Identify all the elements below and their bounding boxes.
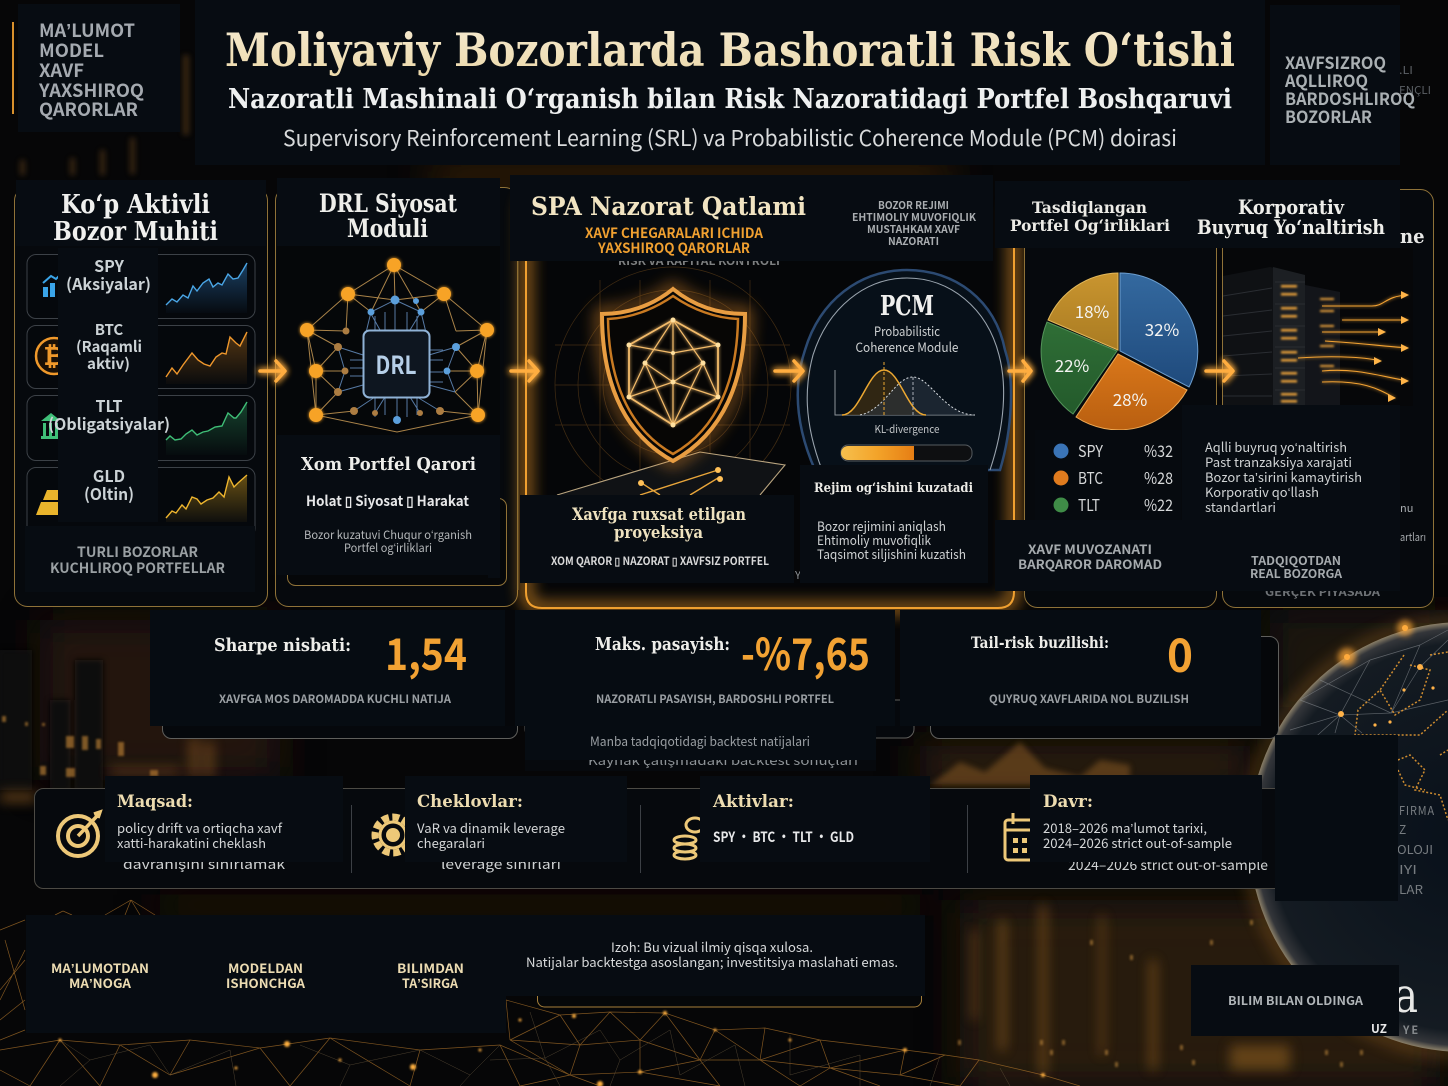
chart: PCM dome with KL divergence: KL-divergence [874,421,940,437]
metric: tail-risk violations: Tail-risk buzilishi: [971,633,1109,652]
asset labels: SPY [94,253,125,277]
metric: tail-risk violations: 0 [1167,620,1193,686]
footer: three pillars: TA’SIRGA [402,973,459,992]
asset labels [48,248,170,522]
card: period: 2018–2026 ma’lumot tarixi, [1043,818,1207,837]
metric: Sharpe ratio: 1,54 [385,619,467,683]
heading: Portfel Og‘irliklari [1010,216,1171,235]
card: risk-permitted projection: XOM QAROR ▯ NAZORAT ▯ XAVFSIZ PORTFEL [551,553,769,569]
callout: top-left keywords: MODEL [39,37,104,63]
legend: %28 [1144,465,1173,489]
asset row: TLT [27,396,255,460]
background: illuminated globe: OLOJI [1397,841,1433,858]
panel: institutional order routing: GERÇEK PİYASADA [1265,584,1381,600]
metric: maximum drawdown: NAZORATLI PASAYISH, BARDOSHLI PORTFEL [596,691,834,707]
asset labels: (Aksiyalar) [66,271,151,295]
footer: brand slogan: UZ [1371,1020,1387,1037]
metric: tail-risk violations [900,610,1278,738]
panel: institutional order routing: nu [1400,500,1413,516]
chart: PCM dome with KL divergence [798,270,1011,470]
caption: XAVF MUVOZANATI [1028,539,1152,558]
metric: tail-risk violations: QUYRUQ XAVFLARIDA NOL BUZILISH [989,691,1189,707]
card: risk-permitted projection [520,495,794,583]
heading: Ko‘p Aktivli [61,190,210,220]
peek text below heading [618,253,801,583]
caption [25,526,255,592]
header peek text at right: .LI [1399,62,1413,78]
card: regime drift monitoring: Bozor rejimini aniqlash [817,516,946,535]
scope line: Supervisory Reinforcement Learning (SRL) va Probabilistic Coherence Module (PCM) doirasi [283,121,1177,153]
card: objective: xatti-harakatini cheklash [117,833,266,852]
metric: Sharpe ratio [150,610,519,738]
callout: top-right keywords: XAVFSIZROQ [1285,49,1386,74]
header peek text at right: ENÇLI [1399,82,1431,98]
asset labels: TLT [95,393,123,417]
card: risk-permitted projection: proyeksiya [614,523,703,543]
title: Moliyaviy Bozorlarda Bashoratli Risk O‘tishi [225,23,1235,77]
heading [1190,180,1400,248]
metric: maximum drawdown: Kaynak çalışmadaki backtest sonuçları [588,750,858,769]
legend: TLT [1078,492,1100,516]
text block: routing benefits: TADQIQOTDAN [1251,552,1341,569]
callout: top-left keywords: QARORLAR [39,96,138,122]
panel: header title block [195,0,1265,165]
pie chart: portfolio weights: 28% [1113,386,1147,411]
card: assets: Aktivlar: [712,792,794,812]
heading: SPA Nazorat Qatlami [531,192,806,221]
icon: coin stacks [674,818,704,859]
panel: institutional order routing: artları [1400,529,1426,545]
heading: Moduli [347,214,428,243]
heading: NAZORATI [888,234,939,249]
footer: brand slogan: YE [1402,1022,1420,1038]
callout: top-left keywords: MA’LUMOT [39,17,135,43]
caption: TURLI BOZORLAR [77,542,198,562]
card: period: Davr: [1043,792,1093,812]
metric: maximum drawdown: -%7,65 [741,619,870,683]
metric: Sharpe ratio: Sharpe nisbati: [214,635,351,656]
asset labels: aktiv) [87,353,130,374]
peek text below cards: davranışını sınırlamak [123,854,285,874]
callout: top-left keywords: XAVF [39,57,84,83]
heading [995,181,1191,248]
card: constraints: VaR va dinamik leverage [417,818,565,837]
text block: routing benefits: Korporativ qo‘llash [1205,482,1319,501]
pie chart: portfolio weights: 18% [1075,298,1109,323]
card: period: 2024–2026 strict out-of-sample [1043,833,1232,852]
footer: disclaimer note: Izoh: Bu vizual ilmiy qisqa xulosa. [611,937,813,956]
footer: disclaimer note [505,915,925,1007]
callout: top-left keywords [12,4,180,132]
icon: gear [375,817,411,853]
card: regime drift monitoring [800,465,988,583]
asset labels: GLD [93,463,125,487]
icon: server racks with routed orders [1223,248,1413,406]
icon: target [58,812,100,856]
caption: KUCHLIROQ PORTFELLAR [50,558,225,578]
icon: calendar [1005,813,1035,860]
subtitle: Nazoratli Mashinali O‘rganish bilan Risk Nazoratidagi Portfel Boshqaruvi [228,84,1232,115]
text block: routing benefits: Bozor ta’sirini kamaytirish [1205,467,1362,486]
asset row: BTC: ₿ [43,336,65,373]
legend [1035,430,1181,520]
background: illuminated globe: LAR [1399,881,1423,898]
card: constraints [405,776,627,862]
text block: routing benefits: Past tranzaksiya xarajati [1205,452,1352,471]
background: illuminated globe [1248,620,1448,1053]
card: constraints: Cheklovlar: [417,792,523,812]
callout: top-right keywords [1270,5,1415,165]
legend: %32 [1144,438,1173,462]
footer: three pillars [26,915,506,1033]
panel: multi-asset market environment [14,180,268,606]
panel: validated portfolio weights [995,181,1216,608]
asset row: SPY [27,254,255,318]
heading [277,178,500,246]
heading: Buyruq Yo‘naltirish [1197,215,1385,239]
legend: %22 [1144,492,1173,516]
panel: SPA control layer [510,175,1014,608]
callout: top-right keywords: AQLLIROQ [1284,67,1368,92]
peek text below cards: leverage sınırları [441,854,561,874]
heading: Korporativ [1238,195,1345,219]
icon: DRL neural network chip: DRL [376,346,416,382]
heading [510,175,993,261]
heading: MUSTAHKAM XAVF [867,222,960,237]
chart: PCM dome with KL divergence: PCM [880,291,934,322]
peek text below cards: 2024–2026 strict out-of-sample [1068,855,1268,875]
text block: routing benefits: REAL BOZORGA [1250,565,1342,582]
asset labels: (Obligatsiyalar) [48,411,170,435]
heading: EHTIMOLIY MUVOFIQLIK [852,210,977,225]
panel: DRL policy module [276,178,518,606]
metric: maximum drawdown: Maks. pasayish: [595,634,730,655]
card: risk-permitted projection: Xavfga ruxsat etilgan [572,505,746,525]
heading: Bozor Muhiti [53,217,218,247]
card: regime drift monitoring: Ehtimoliy muvofiqlik [817,530,932,549]
callout: top-right keywords: BOZORLAR [1285,103,1372,128]
icon: radar grid behind shield [555,267,791,503]
card: objective: Maqsad: [117,792,193,812]
legend: BTC [1078,465,1103,489]
card: raw portfolio decision [277,435,506,586]
pie chart: portfolio weights: 22% [1055,352,1089,377]
icon: glowing shield [600,287,747,463]
caption [995,520,1185,591]
background: illuminated globe: Z [1399,821,1406,838]
callout: top-right keywords: BARDOSHLIROQ [1285,85,1415,110]
panel: institutional order routing: ne [1400,224,1425,248]
text block: routing benefits: standartlari [1205,497,1276,516]
icon: DRL neural network chip [277,246,500,436]
card: constraints: chegaralari [417,833,485,852]
footer: brand slogan: a [1394,968,1418,1024]
text block: routing benefits: Aqlli buyruq yo‘naltirish [1205,437,1347,456]
footer: three pillars: MA’LUMOTDAN [51,958,149,977]
icon: plane below shield [557,452,785,495]
arrows: flow between modules [260,361,1233,381]
card: regime drift monitoring: Rejim og‘ishini kuzatadi [814,481,974,496]
asset labels: (Raqamli [76,336,142,357]
peek text below heading: Y [794,567,801,583]
card: period [1030,775,1262,862]
asset row: BTC [27,326,255,388]
asset row: GLD [27,468,255,538]
metric: Sharpe ratio: XAVFGA MOS DAROMADDA KUCHLI NATIJA [219,691,452,707]
card: objective: policy drift va ortiqcha xavf [117,818,283,837]
asset labels: BTC [95,319,123,340]
card: raw portfolio decision: Holat ▯ Siyosat ▯ Harakat [306,491,469,511]
asset labels: (Oltin) [84,481,134,505]
chart: PCM dome with KL divergence: Probabilistic [874,321,940,340]
chart: PCM dome with KL divergence: Coherence Module [856,337,958,356]
metric: maximum drawdown [515,610,914,771]
footer: three pillars: MA’NOGA [69,973,132,992]
footer: three pillars: MODELDAN [228,958,303,977]
pie chart: portfolio weights [1041,273,1198,430]
card: objective [105,776,343,862]
background: glowing network mesh [0,900,1080,1086]
peek text below heading: RISK VA KAPITAL KONTROLI [618,253,780,269]
footer: brand slogan: BILIM BILAN OLDINGA [1228,992,1363,1009]
panel: institutional order routing [1182,180,1434,608]
footer: three pillars: BILIMDAN [397,958,464,977]
legend: SPY [1078,438,1103,462]
card: raw portfolio decision: Portfel og‘irliklari [344,540,432,556]
footer: brand slogan [1191,965,1420,1038]
background: illuminated globe: IYI [1399,861,1417,878]
caption: BARQAROR DAROMAD [1018,554,1162,573]
card: assets [700,776,930,862]
cover block beside globe [1275,735,1398,901]
heading: YAXSHIROQ QARORLAR [597,238,750,258]
panel: study parameters strip [34,775,1284,888]
footer: disclaimer note: Natijalar backtestga asoslangan; investitsiya maslahati emas. [526,952,898,971]
card: raw portfolio decision: Bozor kuzatuvi Chuqur o‘rganish [304,527,472,543]
callout: top-left keywords: YAXSHIROQ [38,77,144,103]
heading: Tasdiqlangan [1032,198,1148,217]
text block: routing benefits [1182,405,1400,591]
heading: BOZOR REJIMI [878,198,949,213]
header peek text at right [1399,62,1431,98]
metric: maximum drawdown: Manba tadqiqotidagi backtest natijalari [590,731,810,750]
peek text below cards [123,854,1268,875]
card: regime drift monitoring: Taqsimot siljishini kuzatish [817,544,966,563]
card: assets: SPY • BTC • TLT • GLD [713,827,854,847]
heading: DRL Siyosat [319,189,458,218]
heading: XAVF CHEGARALARI ICHIDA [585,223,764,243]
pie chart: portfolio weights: 32% [1145,316,1179,341]
footer: three pillars: ISHONCHGA [226,973,306,992]
card: raw portfolio decision: Xom Portfel Qarori [301,454,476,475]
background: illuminated globe: FIRMA [1399,802,1435,819]
heading [16,180,266,247]
